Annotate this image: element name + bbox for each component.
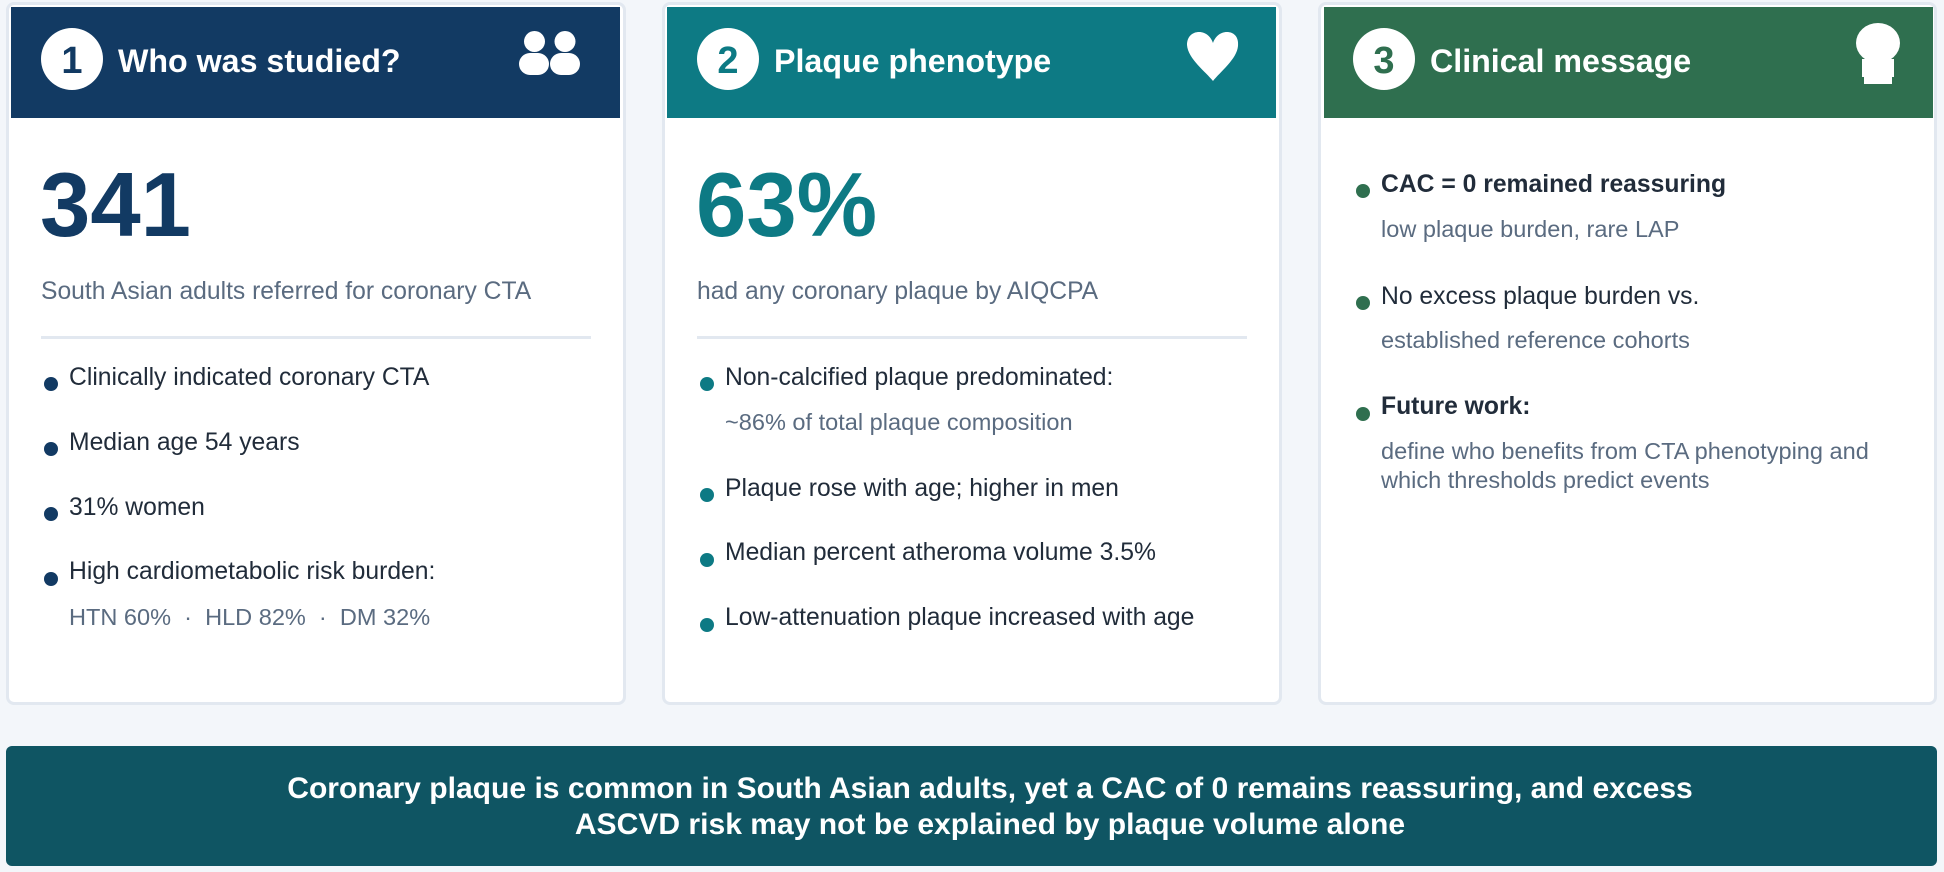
bullet dot bbox=[1356, 184, 1370, 198]
banner text bbox=[287, 772, 1693, 841]
bullet text: Non-calcified plaque predominated: bbox=[725, 364, 1113, 391]
panel: clinical message bbox=[1318, 2, 1937, 705]
sub text: established reference cohorts bbox=[1381, 327, 1690, 353]
icon: light bulb bbox=[1856, 23, 1900, 84]
sub text: define who benefits from CTA phenotyping and bbox=[1381, 438, 1869, 464]
bullet dot bbox=[44, 442, 58, 456]
number badge 1 bbox=[41, 28, 103, 90]
header band: who was studied bbox=[11, 7, 620, 118]
stat caption: had any coronary plaque by AIQCPA bbox=[697, 278, 1098, 305]
bullet dot bbox=[1356, 296, 1370, 310]
heading: who was studied: Who was studied? bbox=[118, 43, 401, 79]
bullet text: Median percent atheroma volume 3.5% bbox=[725, 539, 1156, 566]
bullet dot bbox=[44, 507, 58, 521]
bullet text: CAC = 0 remained reassuring bbox=[1381, 171, 1726, 198]
number badge 3 bbox=[1353, 28, 1415, 90]
bullet text: High cardiometabolic risk burden: bbox=[69, 558, 435, 585]
heading: plaque phenotype: Plaque phenotype bbox=[774, 43, 1051, 79]
bullet text: Clinically indicated coronary CTA bbox=[69, 364, 429, 391]
number badge 2 bbox=[697, 28, 759, 90]
big stat: 341: 341 bbox=[40, 155, 191, 256]
bullet dot bbox=[44, 572, 58, 586]
header band: plaque phenotype bbox=[667, 7, 1276, 118]
bullet text: Future work: bbox=[1381, 393, 1530, 420]
sub text: which thresholds predict events bbox=[1381, 467, 1710, 493]
bullet dot bbox=[700, 377, 714, 391]
bullet dot bbox=[700, 488, 714, 502]
takeaway banner bbox=[6, 746, 1937, 866]
bullet text: 31% women bbox=[69, 494, 205, 521]
bullet text: Median age 54 years bbox=[69, 429, 300, 456]
bullet dot bbox=[700, 553, 714, 567]
icon: heart bbox=[1187, 32, 1238, 81]
bullet dot bbox=[1356, 407, 1370, 421]
number badge 2: 2 bbox=[717, 40, 739, 82]
bullet dot bbox=[44, 377, 58, 391]
bullet dot bbox=[700, 618, 714, 632]
sub text bbox=[1381, 438, 1869, 493]
sub text: low plaque burden, rare LAP bbox=[1381, 216, 1679, 242]
risk factors line: HTN 60% · HLD 82% · DM 32% bbox=[69, 604, 430, 630]
header band: clinical message bbox=[1324, 7, 1933, 118]
bullet text: Plaque rose with age; higher in men bbox=[725, 475, 1119, 502]
bullet text: No excess plaque burden vs. bbox=[1381, 283, 1699, 310]
big stat: 63%: 63% bbox=[696, 155, 877, 256]
banner text: Coronary plaque is common in South Asian adults, yet a CAC of 0 remains reassuring, and excess bbox=[287, 772, 1693, 805]
icon: people bbox=[519, 31, 580, 75]
sub text: ~86% of total plaque composition bbox=[725, 409, 1073, 435]
number badge 3: 3 bbox=[1373, 40, 1395, 82]
heading: clinical message: Clinical message bbox=[1430, 43, 1691, 79]
number badge 1: 1 bbox=[61, 40, 83, 82]
panel: who was studied bbox=[6, 2, 626, 705]
banner text: ASCVD risk may not be explained by plaque volume alone bbox=[575, 808, 1405, 841]
bullet text: Low-attenuation plaque increased with age bbox=[725, 604, 1194, 631]
stat caption: South Asian adults referred for coronary CTA bbox=[41, 278, 531, 305]
panel: plaque phenotype bbox=[662, 2, 1282, 705]
